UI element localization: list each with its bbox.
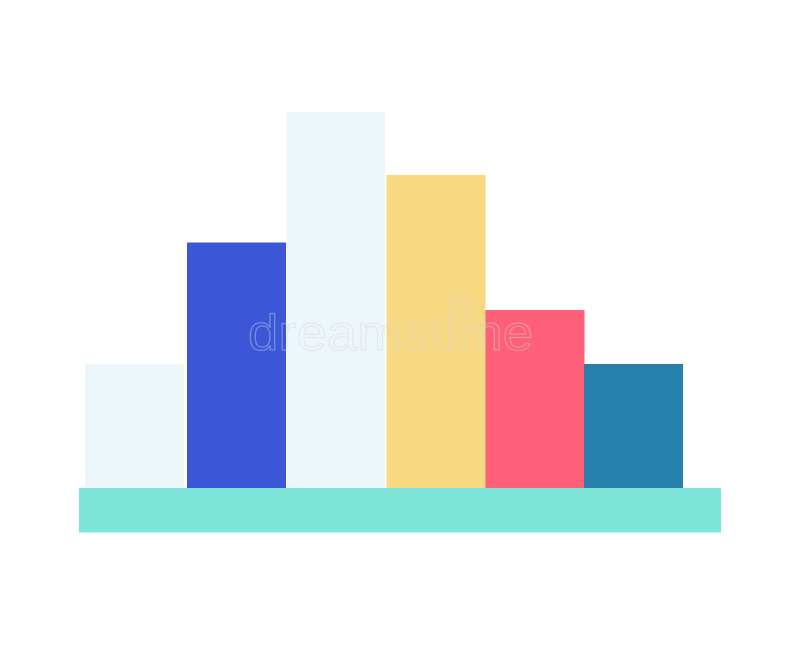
bar 3: pale blue, tallest	[286, 112, 385, 488]
bar 4: yellow	[386, 175, 486, 488]
watermark spiral icon	[449, 294, 475, 320]
bar 1: pale blue	[85, 364, 184, 488]
watermark	[248, 294, 533, 361]
bar 5: coral red	[486, 310, 584, 488]
watermark text: dreamstime	[248, 305, 533, 361]
base platform: mint	[79, 488, 721, 532]
bar 2: royal blue	[187, 242, 286, 488]
bar 6: teal blue	[584, 364, 683, 488]
